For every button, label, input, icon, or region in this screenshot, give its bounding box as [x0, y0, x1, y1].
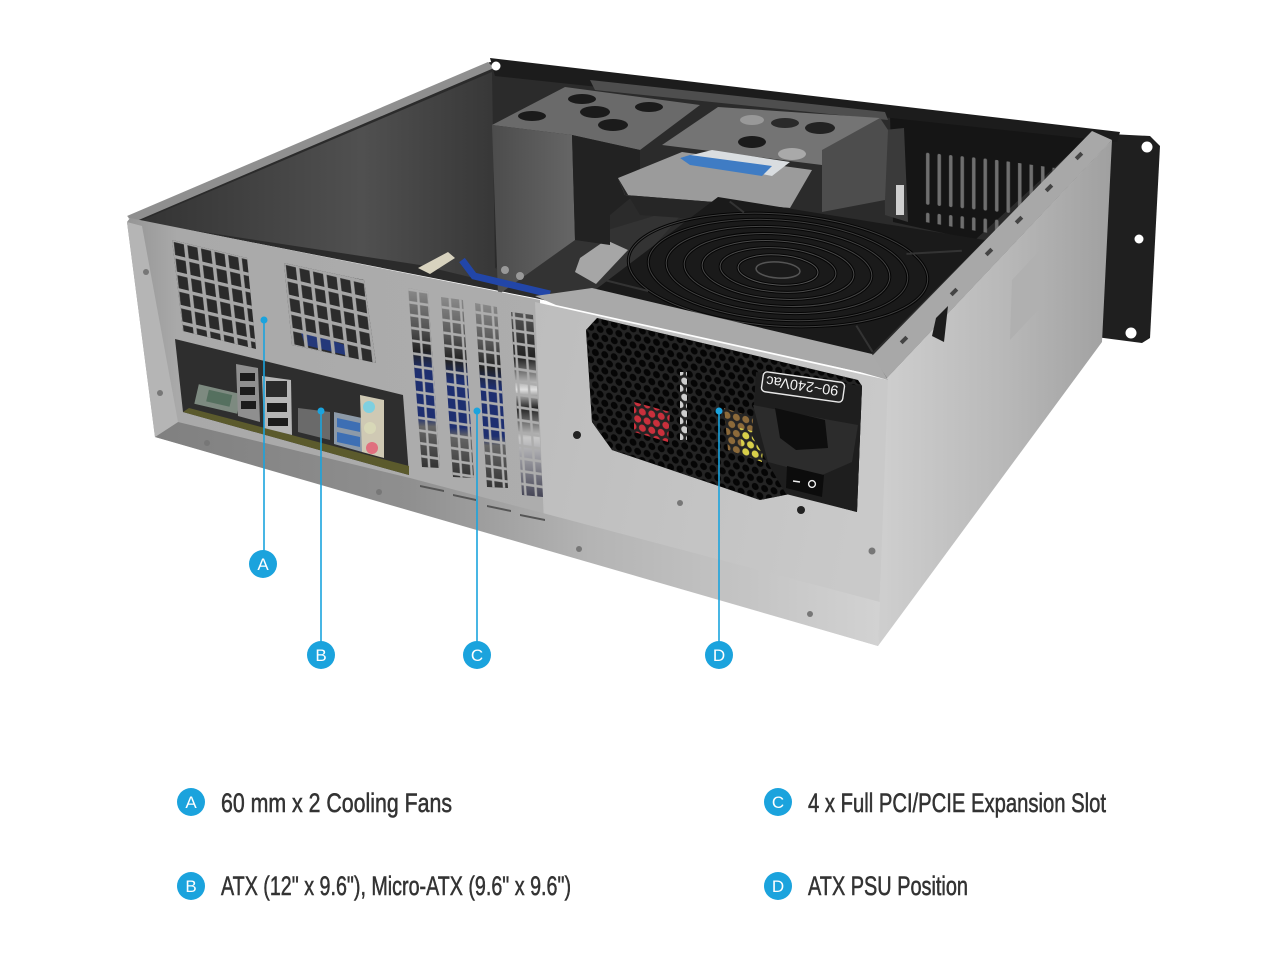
legend item D: ATX PSU Position: [808, 871, 968, 901]
USB stack: [236, 364, 260, 422]
left inner wall: [138, 72, 545, 295]
video and USB ports: [298, 408, 330, 440]
power socket: [753, 405, 858, 476]
PCI expansion slot 2: [441, 297, 474, 478]
PCI expansion slot 4: [511, 312, 543, 497]
legend item D: [764, 871, 968, 901]
callout A: A: [257, 555, 269, 574]
fan grille: [600, 193, 964, 358]
legend item C: [764, 788, 1106, 818]
legend item D: D: [772, 877, 784, 896]
callout B: [307, 408, 335, 669]
PCI expansion slot 1: [408, 288, 440, 468]
lower chassis interior: [495, 205, 690, 296]
USB 3 ports: [334, 412, 362, 452]
drive cage right: [662, 107, 888, 212]
legend item B: B: [185, 877, 197, 896]
legend item C: C: [772, 793, 784, 812]
expansion card and connector: [418, 252, 550, 294]
PSU section face: [535, 302, 888, 646]
callout B: B: [315, 646, 327, 665]
callout C: C: [471, 646, 483, 665]
callout D: [705, 408, 733, 669]
PSU fan plate: [595, 197, 985, 355]
serial port: [194, 384, 242, 414]
rack ear right: [1096, 134, 1160, 343]
screws: [143, 269, 876, 617]
server chassis: [127, 58, 1160, 646]
legend item A: [177, 788, 452, 818]
rear wall with vents: [884, 115, 1090, 240]
legend item A: 60 mm x 2 Cooling Fans: [221, 788, 452, 818]
legend item B: ATX (12" x 9.6"), Micro-ATX (9.6" x 9.6"): [221, 871, 571, 901]
flange screw holes: [900, 152, 1083, 344]
audio jacks: [360, 395, 384, 458]
hard disk drive: [618, 150, 812, 225]
voltage label: 90~240Vac: [765, 372, 840, 398]
rocker switch: [786, 466, 824, 497]
drive cage left: [492, 87, 700, 295]
legend item C: 4 x Full PCI/PCIE Expansion Slot: [808, 788, 1106, 818]
PSU hexagonal mesh: [586, 318, 862, 512]
PSU socket panel: [752, 371, 862, 512]
callout D: D: [713, 646, 725, 665]
fan vent left: [172, 240, 256, 349]
PCI expansion slot 3: [475, 303, 508, 488]
callout C: [463, 408, 491, 669]
right side panel: [872, 131, 1112, 646]
interior cavity: [128, 62, 1112, 378]
left flange: [127, 222, 178, 437]
slot tabs: [420, 485, 545, 521]
LAN and USB stack: [262, 376, 292, 435]
rear rim bar: [490, 58, 1120, 142]
fan vent right: [284, 263, 376, 363]
rear face bottom lip: [155, 422, 880, 646]
legend item A: A: [185, 793, 197, 812]
top lip strip: [535, 288, 888, 380]
legend item B: [177, 871, 571, 901]
rear IO cutout: [175, 339, 409, 475]
callout A: [249, 316, 277, 578]
rear face left section: [127, 218, 545, 548]
floor highlight: [575, 240, 628, 284]
chassis left rim: [127, 62, 494, 222]
